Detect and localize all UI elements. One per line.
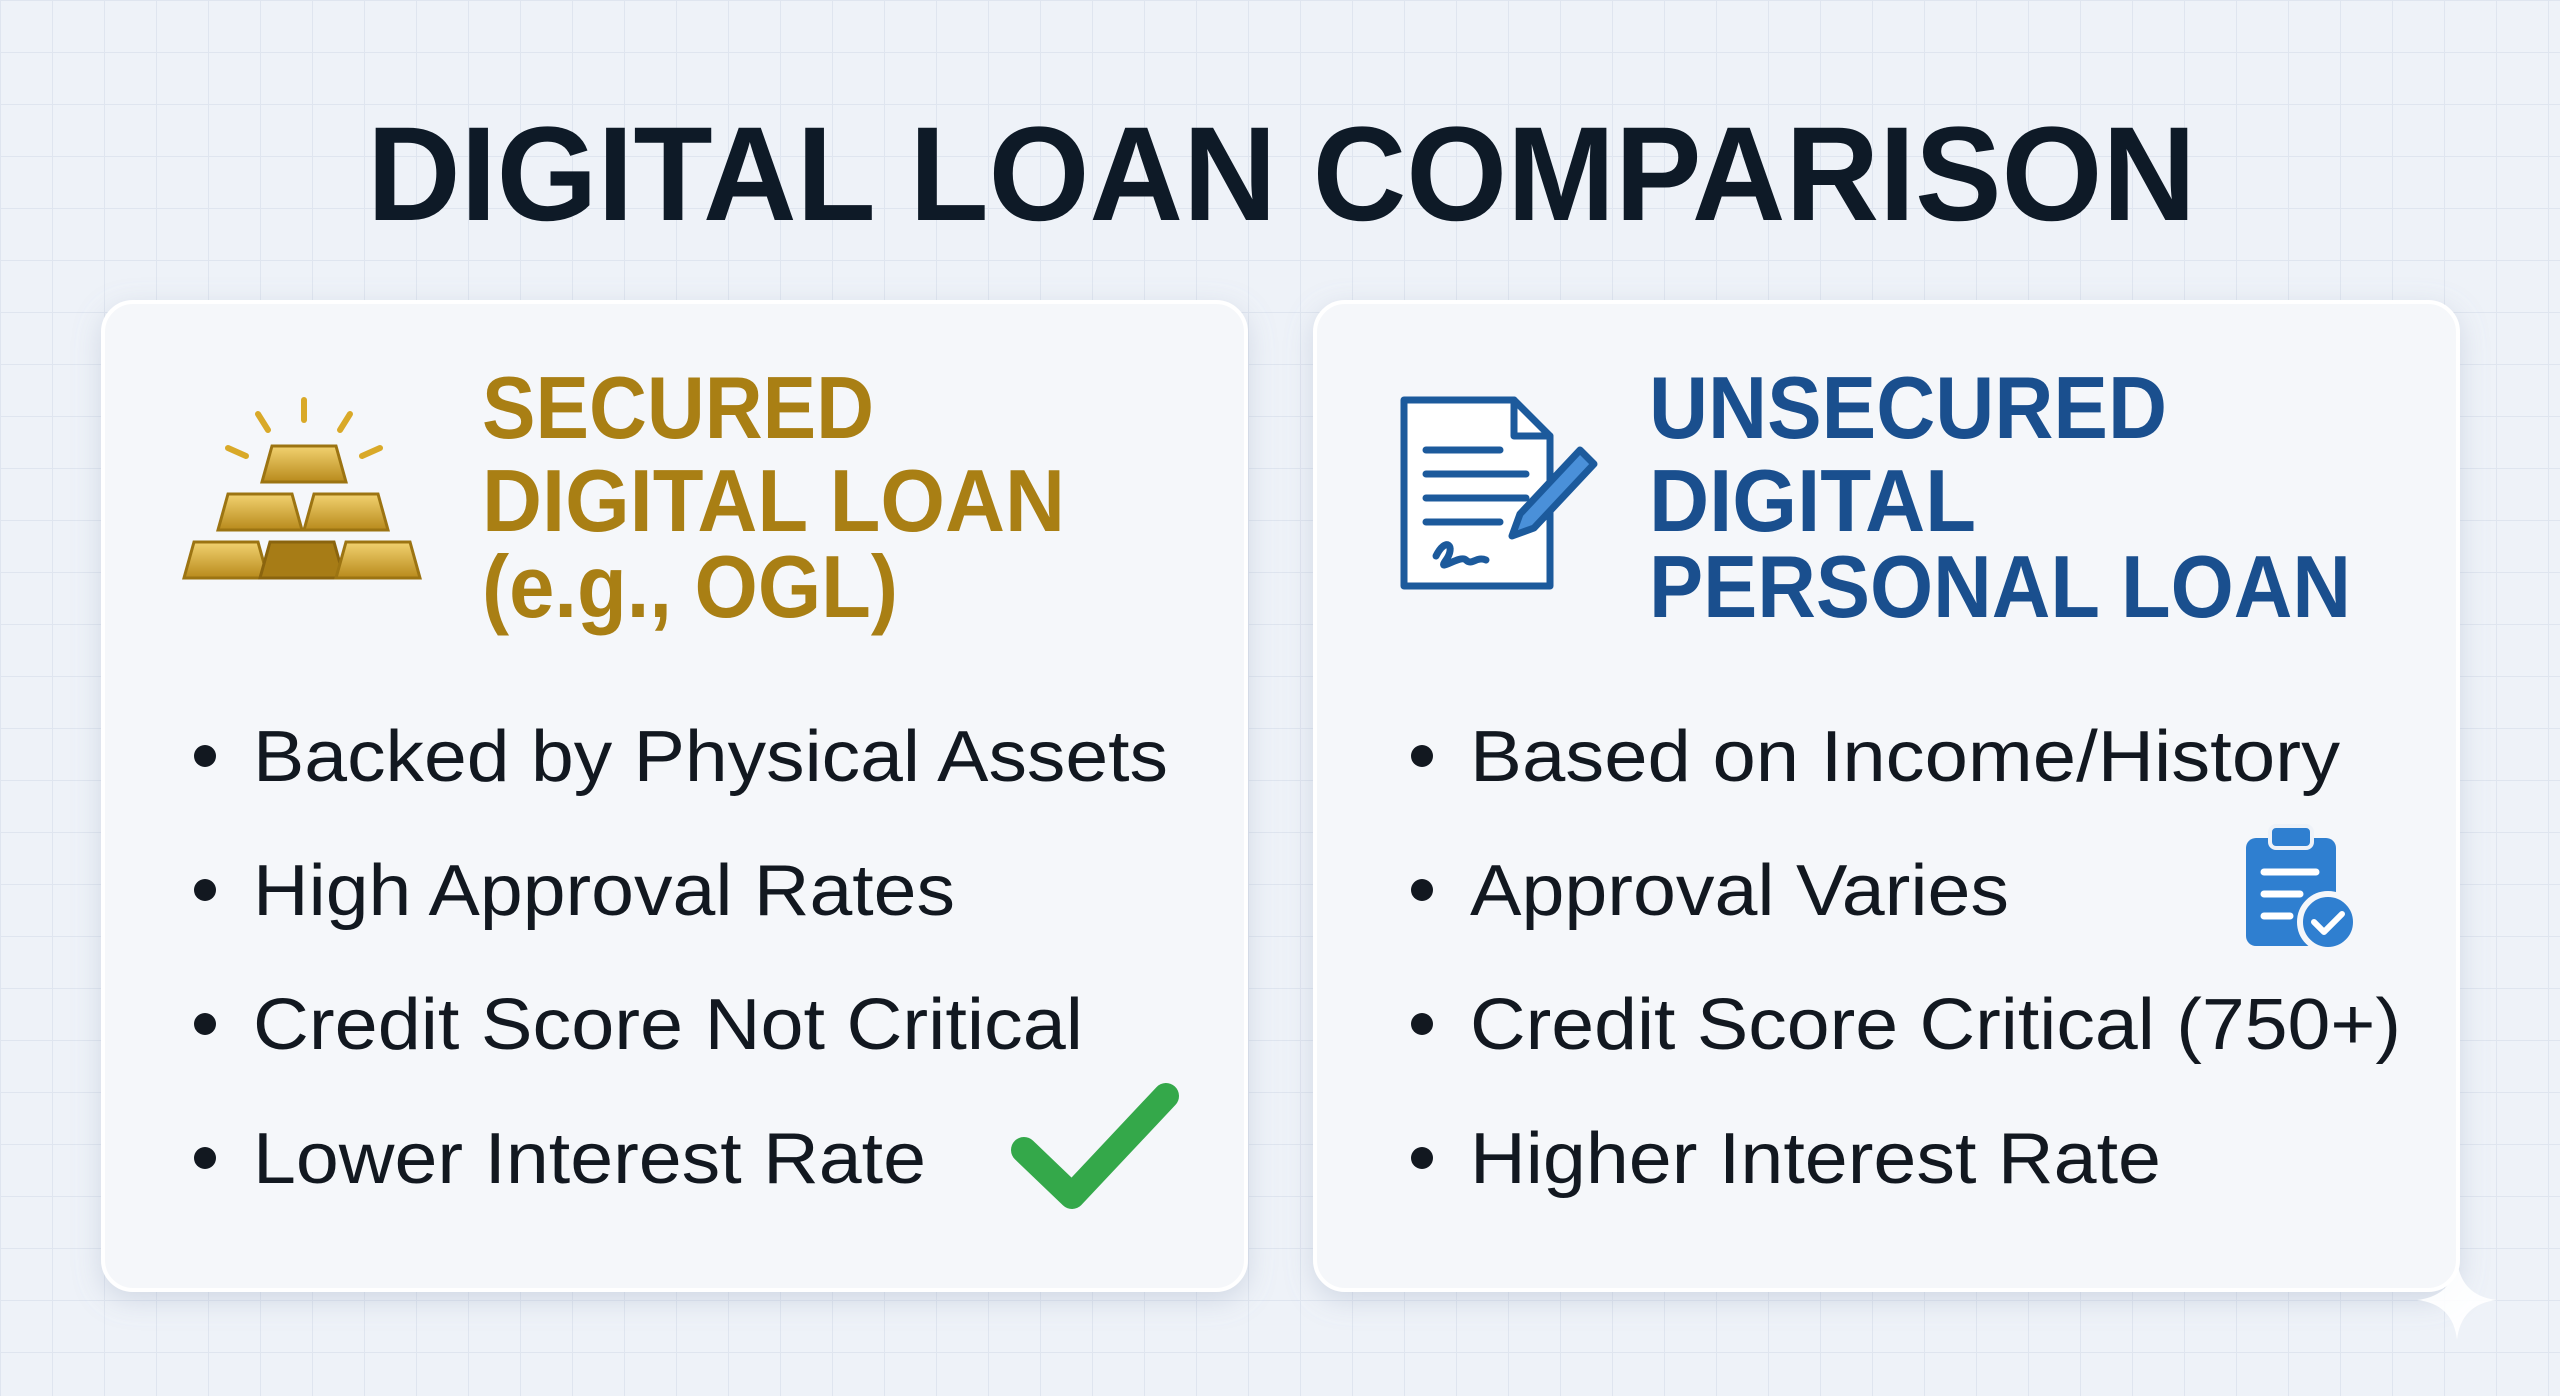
heading: unsecured: PERSONAL LOAN (1649, 537, 2351, 636)
bullets: secured: Lower Interest Rate (253, 1119, 926, 1199)
icon: green check (1024, 1096, 1166, 1196)
bullets: unsecured: Higher Interest Rate (1470, 1119, 2161, 1199)
heading: unsecured: DIGITAL (1649, 451, 1976, 550)
bullets: unsecured: Based on Income/History (1470, 717, 2340, 797)
bullets: secured: Credit Score Not Critical (253, 985, 1083, 1065)
icon: sparkle (2417, 1260, 2497, 1340)
bullets: unsecured: Approval Varies (1470, 851, 2009, 931)
panel: unsecured loan (1315, 302, 2458, 1290)
icon: gold bars (184, 400, 420, 578)
bullets: secured: Backed by Physical Assets (253, 717, 1168, 797)
heading: secured: DIGITAL LOAN (482, 451, 1065, 550)
heading: secured: (e.g., OGL) (482, 537, 898, 636)
title: DIGITAL LOAN COMPARISON (367, 100, 2196, 249)
icon: signed document (1404, 400, 1594, 586)
heading: unsecured: UNSECURED (1649, 358, 2167, 457)
bullets: unsecured (1411, 717, 2401, 1199)
heading: unsecured (1649, 358, 2351, 636)
bullets: secured: High Approval Rates (253, 851, 955, 931)
heading: secured: SECURED (482, 358, 874, 457)
heading: secured (482, 358, 1065, 636)
bullets: secured (194, 717, 1168, 1199)
panel: secured loan (103, 302, 1246, 1290)
icon: clipboard check (2246, 826, 2356, 950)
bullets: unsecured: Credit Score Critical (750+) (1470, 985, 2401, 1065)
